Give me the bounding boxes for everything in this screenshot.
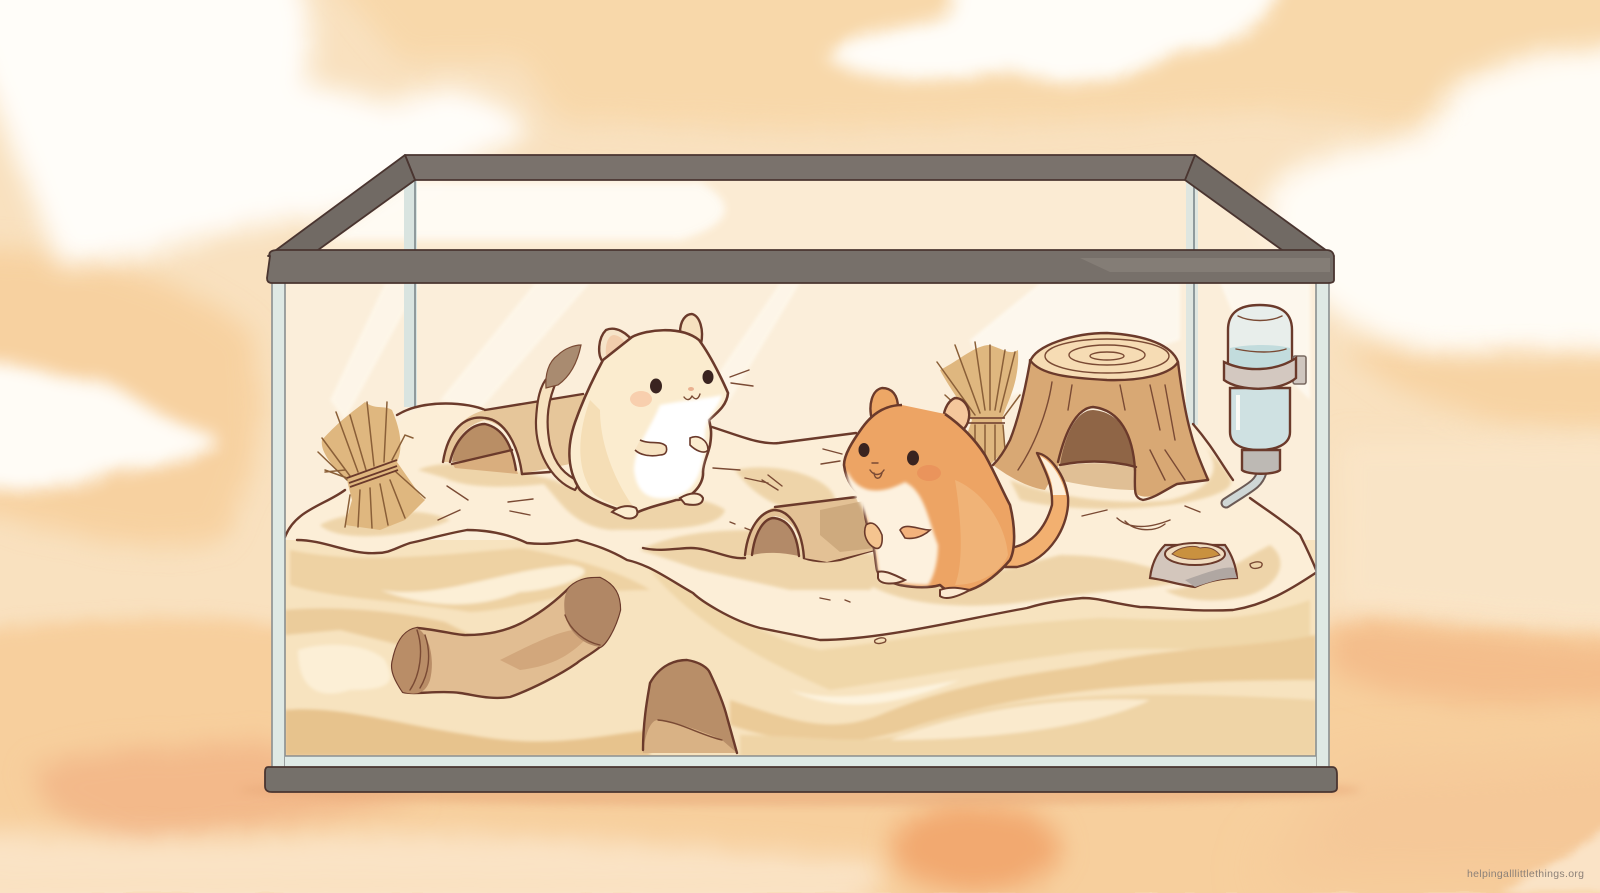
orange gerbil whiskers (821, 449, 842, 464)
ground wash: lower right (1260, 740, 1600, 880)
orange gerbil body (844, 405, 1014, 592)
ground wash: right orange (1330, 624, 1600, 705)
orange gerbil tail (1005, 453, 1068, 567)
orange gerbil paws (865, 523, 882, 548)
bottom glass edge (285, 756, 1316, 767)
orange gerbil belly (847, 470, 938, 585)
orange gerbil cheek (917, 465, 941, 481)
watermark: helpingalllittlethings.org (1467, 868, 1584, 880)
shadow: centre patch (735, 467, 835, 511)
sand band: centre slope (650, 570, 1310, 690)
ground wash: bottom light (0, 825, 880, 893)
bowl food (1172, 546, 1220, 559)
hay bundle behind stump (937, 342, 1020, 470)
sand light streak (380, 565, 585, 604)
sand band: right stripe (730, 635, 1316, 742)
tank shadow on ground (240, 774, 1360, 806)
stump top (1030, 333, 1178, 380)
shadow: cream gerbil (540, 480, 725, 530)
hay binding (968, 418, 1005, 423)
sand light streak right (790, 680, 960, 704)
right glass edge (1316, 283, 1329, 767)
cream gerbil belly (634, 395, 722, 498)
cream gerbil nose (688, 387, 694, 391)
cloud: top left (0, 0, 530, 265)
bottle neck (1242, 450, 1280, 474)
tube half buried, centre (745, 497, 875, 562)
sand band: bottom right (740, 695, 1316, 756)
wash: upper centre peach (300, 0, 1600, 130)
sand light patch left (298, 645, 390, 694)
cream gerbil cheek (630, 391, 652, 407)
cloud: right (1266, 45, 1600, 353)
stump hideout (993, 333, 1210, 500)
ground wash: bottom orange spot (890, 803, 1060, 893)
sand: lower cross section (285, 540, 1316, 756)
bottle clip (1293, 356, 1306, 384)
cream gerbil eyes (650, 378, 662, 394)
bottle lower reservoir (1230, 388, 1290, 450)
front rim highlight (1080, 258, 1330, 272)
orange gerbil left ear (870, 388, 898, 420)
shadow: bowl (1165, 545, 1280, 600)
cream gerbil tail (536, 377, 580, 490)
orange gerbil nose and mouth (870, 463, 884, 478)
cream gerbil shading (580, 400, 636, 510)
cloud: left middle (0, 359, 215, 490)
cream gerbil paws (635, 440, 667, 456)
orange gerbil eyes (858, 443, 870, 457)
cream gerbil tail tuft (546, 345, 581, 388)
shadow: stump (1010, 440, 1231, 509)
burrow mound (643, 660, 737, 753)
sand specks and straw bits (438, 468, 1262, 643)
orange gerbil right ear (943, 398, 969, 435)
cream gerbil (536, 314, 753, 518)
sand band: bottom left (285, 709, 650, 756)
ground wash (0, 618, 1600, 893)
tank frame: bottom rail (265, 767, 1337, 792)
sand: top surface (285, 398, 1317, 640)
left glass edge (272, 283, 285, 767)
sand light patch bottom right (890, 699, 1150, 740)
sand surface shadows (320, 440, 1280, 606)
bottle collar (1224, 358, 1296, 389)
orange gerbil feet (878, 572, 905, 584)
water bottle (1224, 305, 1306, 503)
cream gerbil mouth (684, 394, 700, 400)
tank back view: interior through the top (318, 180, 1282, 250)
front rim (267, 250, 1334, 283)
cream gerbil left ear (599, 329, 635, 362)
ground wash: left orange (30, 740, 420, 850)
buried tube left opening (392, 628, 432, 694)
buried tube shading (500, 630, 590, 670)
wash: right mid peach (1340, 338, 1600, 430)
hay binding (347, 460, 398, 487)
tank interior glass area (286, 284, 1316, 540)
cream gerbil body (569, 330, 728, 513)
hay bundle left (318, 402, 425, 530)
back glass posts (404, 180, 1198, 425)
sand surface outlines (285, 404, 1317, 640)
back rim (405, 155, 1195, 180)
buried tube right opening (564, 578, 620, 647)
wash: left mid peach (0, 248, 260, 545)
cream gerbil right ear (680, 314, 702, 344)
shadow: orange gerbil (860, 555, 1190, 606)
buried tube (392, 578, 620, 698)
tank frame: top (267, 155, 1334, 283)
wash: cloud visible through glass (330, 182, 725, 240)
right rim (1185, 155, 1334, 258)
shadow: second tube (640, 530, 900, 590)
tube half buried, upper left (443, 394, 600, 474)
glass walls (272, 283, 1329, 767)
cloud: top centre (825, 0, 1290, 82)
food bowl (1150, 543, 1237, 587)
sand band 2 (285, 608, 480, 645)
left rim (268, 155, 415, 258)
bottle cap top (1228, 305, 1292, 365)
cream gerbil feet (612, 506, 637, 518)
bottle spout (1226, 472, 1262, 503)
wash: right lower cream (1340, 440, 1600, 640)
shadow: first tube (418, 464, 560, 487)
light rays (330, 283, 1310, 420)
sand band 1 (290, 548, 650, 612)
orange gerbil (821, 388, 1068, 598)
cream gerbil whiskers (730, 370, 753, 386)
orange gerbil shading (955, 480, 1008, 585)
shadow: first hay bundle (320, 511, 450, 536)
